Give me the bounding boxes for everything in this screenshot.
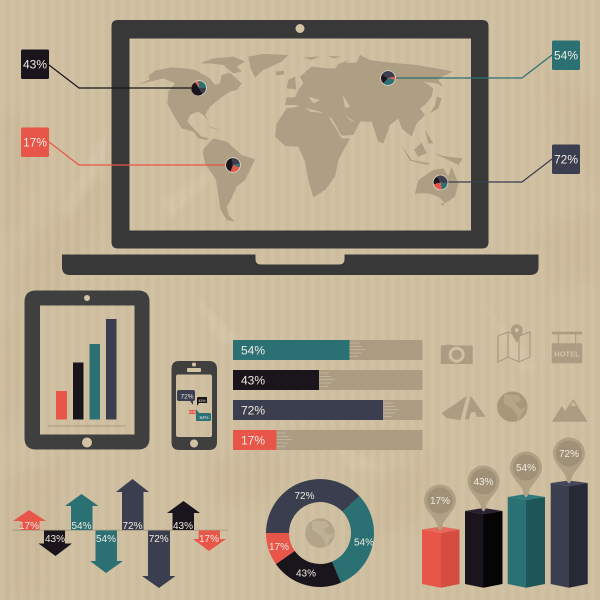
icon: hotel sign [552, 332, 582, 363]
arrow down: 72% [142, 530, 176, 588]
arrow down: 72%: 72% [149, 534, 169, 545]
arrow chart [12, 479, 228, 588]
pin: 54% [510, 452, 542, 498]
arrow up: 17%: 17% [19, 521, 39, 532]
3D bar: 54% [508, 494, 545, 588]
donut chart [266, 479, 374, 587]
callout: 72%: 72% [554, 152, 578, 166]
3D bar: 43% [465, 508, 502, 588]
map: Eurasia, Africa and Oceania [275, 55, 463, 206]
arrow up: 72%: 72% [122, 521, 143, 532]
donut segment: 17% [266, 533, 295, 564]
arrow up: 72% [116, 479, 149, 532]
pin: 17% [424, 484, 456, 530]
arrow down: 54%: 54% [96, 534, 116, 545]
donut labels [269, 491, 374, 580]
horizontal bar: 72% [233, 400, 422, 420]
horizontal bar: 72%: 72% [241, 404, 265, 418]
arrow down: 54% [90, 530, 123, 573]
laptop base [62, 254, 538, 275]
laptop camera [296, 24, 304, 33]
horizontal bar: 54% [233, 340, 422, 360]
arrow down: 17% [193, 530, 226, 551]
donut segment: 54% [332, 496, 374, 583]
tablet frame [24, 290, 150, 450]
donut labels: 17% [269, 542, 289, 553]
horizontal bar: 43%: 43% [241, 374, 265, 388]
arrow down: 43%: 43% [45, 534, 65, 545]
pie marker: South America [225, 157, 241, 173]
arrow down: 17%: 17% [199, 534, 219, 545]
map: Americas and Arctic [137, 54, 288, 222]
phone frame [172, 361, 217, 450]
3D bar: 72% [551, 480, 588, 588]
3D bar: 17% [422, 526, 460, 588]
pie marker: North America [191, 80, 207, 96]
horizontal bar: 17% [233, 430, 422, 450]
icon: map with pin [498, 324, 530, 362]
horizontal bar: 43% [233, 370, 422, 390]
pin: 43%: 43% [473, 477, 494, 488]
phone speaker [187, 368, 201, 372]
callout: 72% [433, 144, 580, 190]
arrow up: 54%: 54% [71, 521, 92, 532]
donut labels: 43% [296, 568, 316, 580]
icon: globe [497, 392, 528, 422]
callout: 54% [380, 40, 580, 86]
tablet camera [84, 295, 90, 301]
laptop [62, 20, 538, 275]
arrow up: 43% [167, 501, 200, 532]
phone camera [192, 362, 196, 366]
icon: mountains [552, 399, 588, 422]
phone bubble: 43%: 43% [198, 399, 206, 403]
icon: camera [441, 345, 473, 364]
phone bubble: 17%: 17% [189, 410, 195, 414]
horizontal bar: 54%: 54% [241, 344, 265, 358]
callout: 17%: 17% [23, 136, 47, 150]
donut labels: 54% [354, 538, 374, 548]
phone home button [190, 440, 198, 448]
pin: 72% [553, 438, 585, 484]
callout: 43% [21, 50, 207, 96]
tablet [24, 290, 150, 450]
tablet bar chart [48, 319, 126, 426]
pin: 72%: 72% [559, 449, 579, 460]
arrow up: 17% [13, 510, 46, 532]
pin: 54%: 54% [516, 463, 536, 474]
arrow up: 43%: 43% [173, 521, 193, 532]
callout: 54%: 54% [554, 48, 578, 62]
laptop screen frame [112, 20, 488, 248]
donut segment: 43% [276, 551, 341, 587]
icon: hotel sign: HOTEL [554, 350, 580, 358]
pie marker: Australia [433, 175, 448, 190]
pie marker: Asia [380, 70, 396, 86]
phone bubble: 54%: 54% [199, 415, 209, 420]
pin: 17%: 17% [430, 496, 450, 507]
pin: 43% [468, 466, 500, 512]
tablet home button [82, 438, 92, 448]
horizontal bar: 17%: 17% [241, 434, 265, 448]
phone bubble: 72%: 72% [180, 394, 194, 400]
icon: tent [442, 396, 486, 420]
smartphone [172, 361, 217, 450]
donut labels: 72% [294, 491, 315, 502]
world map [137, 54, 463, 222]
donut segment: 72% [266, 479, 359, 533]
callout: 17% [21, 128, 241, 173]
icon: donut globe [305, 518, 335, 548]
callout: 43%: 43% [23, 58, 47, 72]
arrow up: 54% [65, 494, 98, 532]
arrow down: 43% [38, 530, 72, 556]
